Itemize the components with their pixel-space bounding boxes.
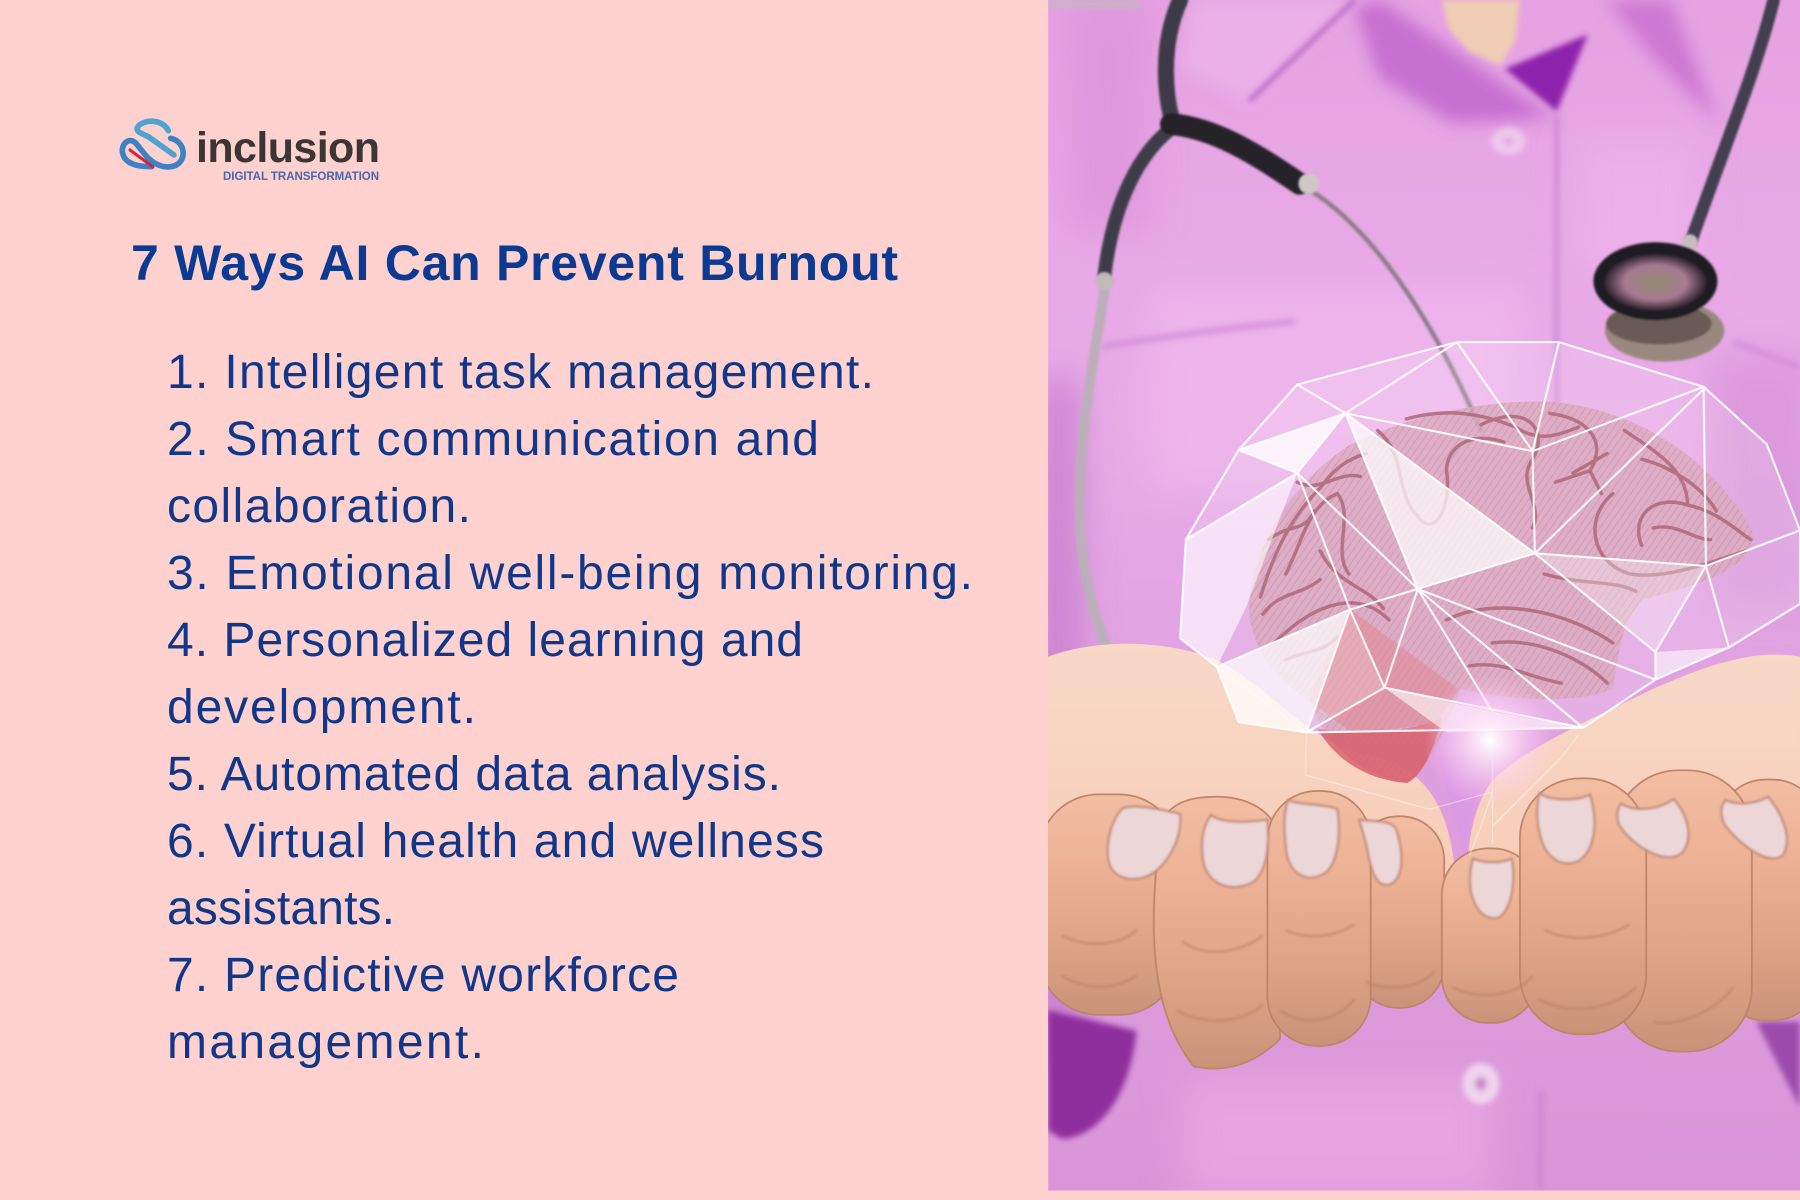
brain sketch hatching xyxy=(1249,402,1754,783)
list of seven ways: collaboration. xyxy=(167,480,471,533)
crystal wireframe lines xyxy=(1180,342,1800,732)
purple gap between hands xyxy=(1437,746,1504,855)
title: 7 Ways AI Can Prevent Burnout xyxy=(131,235,898,291)
shirt button top xyxy=(1491,127,1526,155)
icon: cloud logo mark xyxy=(122,121,183,167)
dark sleeve shadows xyxy=(1048,1010,1800,1139)
list of seven ways: 3. Emotional well-being monitoring. xyxy=(167,547,973,600)
left palm xyxy=(1048,644,1454,875)
left hand fingers xyxy=(1039,791,1444,1068)
logo: inclusion digital transformation xyxy=(122,121,380,183)
list of seven ways: 4. Personalized learning and xyxy=(167,614,803,667)
right palm xyxy=(1468,654,1800,856)
stethoscope chest piece xyxy=(1593,242,1724,362)
crystal translucent facets xyxy=(1180,342,1800,732)
shirt shading xyxy=(1039,0,1800,1194)
brain cerebellum xyxy=(1318,718,1442,783)
stethoscope metal fittings xyxy=(1095,173,1698,290)
right hand fingers xyxy=(1442,770,1800,1052)
faint lower wires xyxy=(1304,734,1579,856)
shirt background xyxy=(1048,0,1800,1190)
shirt button bottom xyxy=(1463,1063,1499,1104)
photo: doctor holding a holographic brain xyxy=(1039,0,1800,1194)
list of seven ways: management. xyxy=(167,1016,484,1069)
list of seven ways: development. xyxy=(167,681,476,734)
list of seven ways: 6. Virtual health and wellness xyxy=(167,815,824,868)
collar xyxy=(1182,0,1719,123)
list of seven ways xyxy=(167,346,973,1069)
top corner highlight xyxy=(1048,0,1140,8)
stethoscope xyxy=(1080,0,1774,649)
finger knuckle creases xyxy=(1062,924,1733,1023)
crystal polyhedron hologram xyxy=(1180,342,1800,855)
list of seven ways: 1. Intelligent task management. xyxy=(167,346,874,399)
logo tagline: DIGITAL TRANSFORMATION xyxy=(223,171,379,183)
list of seven ways: assistants. xyxy=(167,882,395,935)
placket seam and pocket lines xyxy=(1102,115,1800,1190)
fingernails xyxy=(1108,793,1787,918)
brain lower lobe tint xyxy=(1309,608,1458,735)
brain illustration xyxy=(1249,402,1754,783)
logo wordmark: inclusion xyxy=(196,124,380,172)
list of seven ways: 7. Predictive workforce xyxy=(167,949,679,1002)
glowing light point xyxy=(1428,681,1547,798)
list of seven ways: 2. Smart communication and xyxy=(167,413,819,466)
brain folds xyxy=(1261,413,1751,683)
list of seven ways: 5. Automated data analysis. xyxy=(167,748,781,801)
